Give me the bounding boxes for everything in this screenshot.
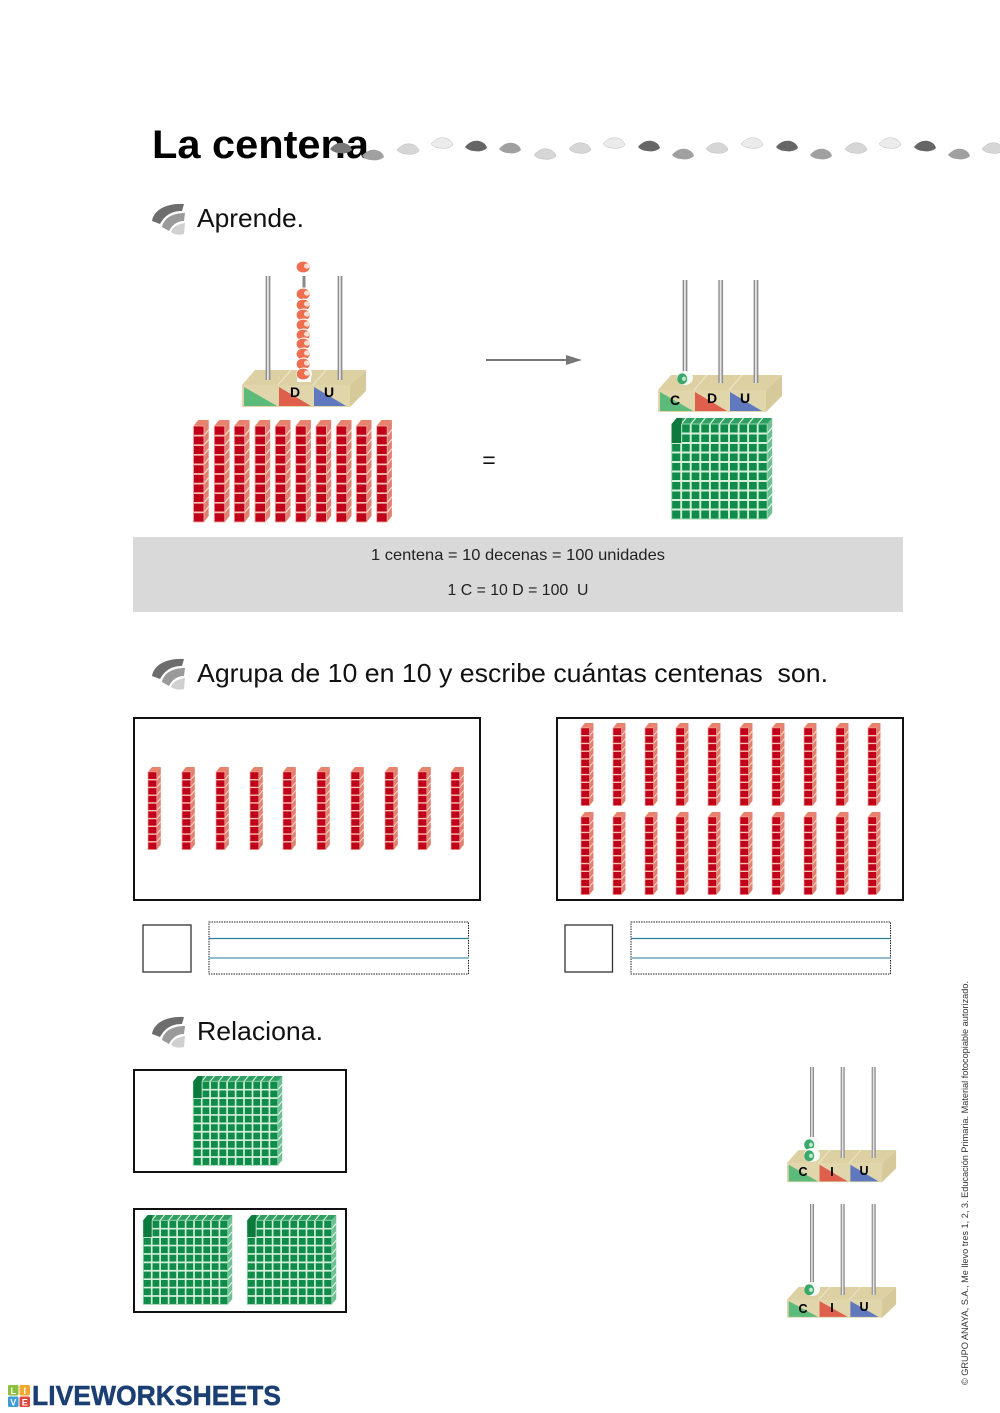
copyright note: © GRUPO ANAYA, S.A., Me llevo tres 1, 2, 3. Educación Primaria. Material fotocopiable autorizado.: [960, 981, 971, 1385]
answer box left: [143, 925, 191, 972]
abacus: two beads: U: [859, 1164, 869, 1178]
abacus: one bead: U: [859, 1300, 869, 1314]
abacus: one bead: I: [830, 1301, 834, 1315]
green hundred block: [672, 418, 772, 519]
grey definition band: 1 C = 10 D = 100 U: [448, 582, 588, 599]
decorative stone trail: [330, 138, 1000, 160]
writing lines right: [631, 922, 890, 974]
abacus: D and U with ten beads: [242, 260, 366, 407]
abacus: two beads: C: [798, 1165, 808, 1179]
grey definition band: [133, 537, 903, 612]
answer box right: [565, 925, 612, 972]
abacus: C with one bead: U: [740, 390, 750, 406]
equals sign: =: [482, 447, 496, 473]
heading: Agrupa: Agrupa de 10 en 10 y escribe cuántas centenas son.: [197, 658, 828, 688]
writing lines left: [209, 922, 469, 974]
abacus: one bead: C: [798, 1302, 808, 1316]
logo: Liveworksheets: I: [23, 1386, 26, 1396]
heading: Relaciona: Relaciona.: [197, 1016, 323, 1046]
logo: Liveworksheets: V: [10, 1398, 16, 1408]
panel: twenty rods: [557, 718, 903, 900]
ten red rods: [194, 420, 392, 522]
abacus: D and U with ten beads: U: [324, 384, 334, 400]
abacus: C with one bead: D: [707, 390, 717, 406]
logo: Liveworksheets: LIVEWORKSHEETS: [32, 1380, 281, 1411]
icon: section marker Relaciona: [152, 1017, 185, 1048]
panel: ten rods: [134, 718, 480, 900]
panel: one block: [134, 1070, 346, 1172]
abacus: D and U with ten beads: D: [290, 384, 300, 400]
logo: Liveworksheets: L: [10, 1386, 16, 1396]
heading: Aprende: Aprende.: [197, 203, 304, 233]
arrow: [486, 355, 582, 365]
logo: Liveworksheets: E: [22, 1398, 28, 1408]
title: La centena: [152, 123, 370, 167]
abacus: C with one bead: C: [670, 392, 680, 408]
abacus: two beads: [787, 1067, 896, 1182]
grey definition band: 1 centena = 10 decenas = 100 unidades: [371, 547, 665, 564]
abacus: two beads: I: [830, 1165, 834, 1179]
panel: two blocks: [134, 1209, 346, 1312]
abacus: one bead: [787, 1204, 896, 1318]
icon: section marker Agrupa: [152, 659, 185, 690]
abacus: C with one bead: [658, 280, 782, 412]
icon: section marker Aprende: [152, 204, 185, 235]
